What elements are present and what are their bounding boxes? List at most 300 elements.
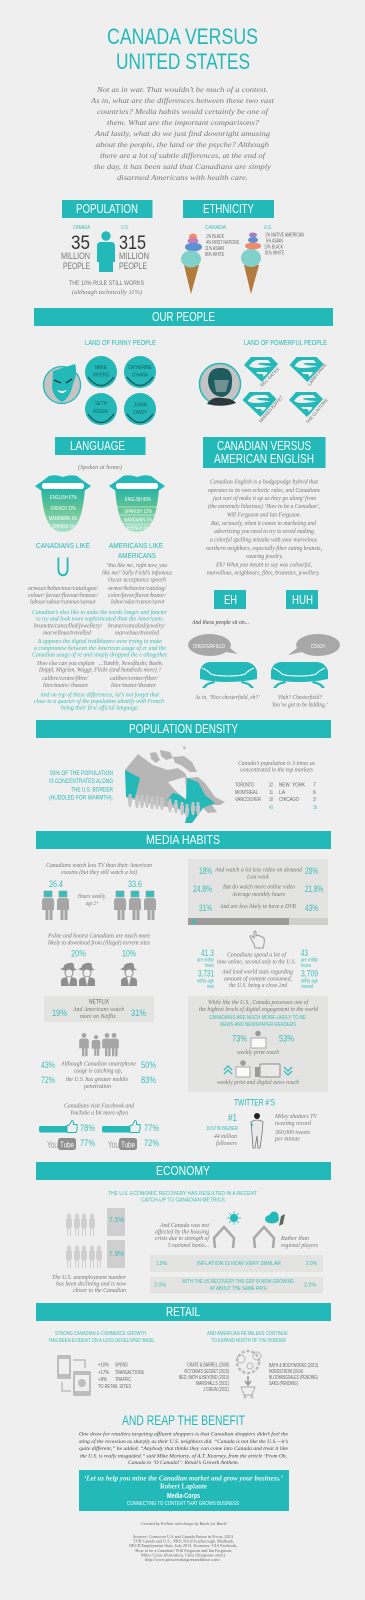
callout: 93 percent near border: THE U.S. BORDER (71, 786, 113, 794)
credits line: ‘Created by Pollinit with design by Battle for Battle’ (140, 1521, 229, 1526)
top markets comparison: CHICAGO (279, 797, 299, 803)
sources: TVB Canada and U.S., NRS, NAA/Scarborough, Madbank, (133, 1540, 234, 1544)
e-commerce stats (98, 1363, 144, 1390)
spelling comparison: double l words: brunette/cancelled/jewellery/ (34, 624, 103, 630)
icon: US tongue with language shares (109, 475, 165, 532)
icons: pirates (60, 963, 138, 986)
panel: torrents (47, 934, 151, 986)
panel: American retailers: AND AMERICAN RETAILERS CONTINUE (207, 1331, 289, 1337)
spelling comparison: -re words: liter/meter/theater (111, 683, 157, 689)
badge: Catherine O'Hara (124, 356, 156, 388)
online video row: 24.8% (193, 884, 212, 894)
engagement text: While like the U.S., Canada possesses one of (208, 999, 309, 1006)
panel: Facebook and YouTube: YouTube a bit more often (70, 1110, 128, 1116)
panel: torrents: likely to download from (illegal) torrent sites (48, 940, 151, 946)
badge: Catherine O'Hara: O’HARA (132, 372, 149, 378)
stats: monthly hours: 41.3 (201, 948, 214, 958)
heading: retail (36, 1303, 331, 1321)
panel: Netflix (44, 996, 154, 1022)
YouTube US: 72% (144, 1138, 159, 1148)
note: longer and fancier words: to try and look more sophisticated than the Americans. (36, 616, 164, 622)
online video row: 21.8% (305, 884, 323, 894)
YouTube US (108, 1138, 159, 1151)
English explanation text: marvellous, neighbours, fibre, brunettes, jewellery. (207, 570, 320, 576)
news readers heading: NEWS AND NEWSPAPER READERS (220, 1022, 297, 1028)
sofa captions: As in, ‘Nice chesterfield, eh?’ (194, 694, 260, 701)
top markets comparison: LA (279, 790, 286, 796)
panel: e-commerce: STRONG CANADIAN E-COMMERCE GROWTH (55, 1331, 146, 1337)
panel: Facebook and YouTube (39, 1104, 159, 1151)
top markets comparison: concentrated in the top markets (240, 768, 314, 774)
online time text: Canadians spend a lot of (227, 952, 287, 959)
icon: Canada tongue with language shares: SPANISH 1% (52, 524, 75, 530)
callout: Media-Corps quote: Media-Corps (167, 1493, 200, 1500)
panel: torrents: 20% (71, 949, 86, 959)
e-commerce stats: SPEND (115, 1363, 128, 1369)
housing text Canada (155, 1223, 210, 1249)
top markets comparison: 22 (269, 783, 273, 789)
icon: house with sun (214, 1211, 241, 1248)
sources: ‘How to be a Canadian’ Will Ferguson and Ian Ferguson, (134, 1548, 232, 1554)
inflation strip (150, 1255, 323, 1272)
speech bubble: chesterfield (188, 634, 238, 656)
panel: American retailers: TO EXPAND NORTH OF THE BORDER (211, 1338, 286, 1344)
unemployment text: has been declining and is now (56, 1282, 126, 1288)
note: digital trailblazers: It appears the digital trailblazers were trying to make (37, 639, 162, 645)
population figures: U.S. (121, 225, 129, 231)
stats: monthly hours: hours (205, 963, 214, 969)
housing text Canada: affected by the housing (155, 1228, 209, 1236)
badge: John Candy: CANDY (133, 410, 148, 416)
icon: US tongue with language shares: SPANISH 12% (124, 509, 152, 515)
panel: American retailers (179, 1331, 318, 1398)
speech bubble: couch: COUCH (311, 644, 325, 650)
smartphone text: penetration (83, 1084, 111, 1090)
English explanation text: just sort of make it up as they go along’ from (212, 495, 316, 502)
title: CANADA VERSUS (107, 24, 258, 49)
icon: US ice cream cone (241, 232, 261, 294)
spelling comparison: -our words: armour/behaviour/catalogue/ (28, 586, 99, 592)
online video row: But do watch more online video (223, 884, 295, 890)
e-commerce stats: TRANSACTIONS (115, 1370, 144, 1376)
icon: US tongue with language shares: FRENCH 1% (127, 526, 149, 532)
stats: monthly pages: mthly age (197, 978, 214, 984)
online time text (217, 952, 296, 989)
panel: online time (197, 948, 318, 990)
10 percent rule note (69, 281, 144, 296)
online video row (193, 884, 323, 898)
e-commerce stats: +9% (98, 1377, 107, 1383)
heading: economy: ECONOMY (156, 1163, 210, 1178)
panel: ethnicity (181, 200, 304, 294)
unemployment text (52, 1275, 127, 1294)
icon: shopping cloud and cart (237, 1351, 261, 1398)
subheads: Canadians like and Americans like: AMERICANS LIKE (109, 541, 163, 550)
Canada ethnicity legend (205, 225, 239, 258)
panel: news reading: weekly print and digital news reach (217, 1080, 299, 1086)
e-commerce stats: TRAFFIC (115, 1377, 131, 1383)
English explanation text: wearing jewelry. (246, 554, 283, 560)
icon: right sofa (271, 662, 328, 688)
note: dropped e brand names: How else can you explain ...Tumblr, Newsflashr, Bashr, (36, 660, 164, 667)
English explanation text: Canadian English is a hodgepodge hybrid that (210, 480, 318, 486)
badge: Seth Rogen: ROGEN (93, 409, 108, 415)
online time text: And lead world stats regarding (221, 970, 293, 976)
benefit paragraph: quite different,” he added. “Anybody that thinks they can come into Canada and treat it like (79, 1445, 289, 1452)
heading: Canadian versus American English: AMERICAN ENGLISH (214, 451, 314, 466)
sources: Sources: Comscore U.S and Canada Future in Focus, 2013 (133, 1535, 233, 1540)
stats: monthly pages (197, 969, 318, 990)
spelling comparison: -our words: labor/odor/rumor/savor (111, 600, 166, 606)
retailer list left: VICTORIA’S SECRET (2010) (184, 1369, 229, 1375)
economy intro heading: CATCH-UP TO CANADIAN METRICS. (141, 1198, 226, 1204)
shield: Warren Buffet: WARREN BUFFET (258, 395, 284, 424)
note: French first language (34, 692, 164, 712)
GDP strip: 2.0% (154, 1282, 167, 1288)
retailer list left (179, 1363, 229, 1393)
sources: http://www.picturesthatgoesandthose.com/. (145, 1558, 221, 1562)
callout: Media-Corps quote: ‘Let us help you mine the Canadian market and grow your business.’ (84, 1474, 283, 1483)
Canada ethnicity legend: 1% BLACK (206, 234, 224, 240)
shield: Larry Page: LARRY PAGE (307, 362, 327, 387)
heading: Canadian versus American English (203, 437, 326, 468)
panel: Canadian versus American English (188, 437, 340, 708)
Justin Bieber stat (206, 1113, 238, 1147)
panel: news reading (188, 996, 328, 1092)
icons: TV-headed people (42, 891, 156, 920)
print reach stats: 53% (279, 1034, 294, 1044)
housing text Canada: 5 national banks... (168, 1243, 209, 1249)
badge: Catherine O'Hara: CATHERINE (128, 365, 153, 371)
callout: 93 percent near border: 93% OF THE POPULATION (50, 770, 113, 777)
panel: population density (49, 746, 317, 823)
icon: house with cloud (254, 1212, 285, 1248)
icon: arrows up (224, 1066, 232, 1074)
panel: Twitter (206, 1098, 318, 1148)
sources: OECD Employment Stats, July 2013, Economy -CIA Factbook, (129, 1544, 237, 1549)
intro text block: countries? Media habits would certainly be one of (97, 107, 269, 116)
icon: digital reader (255, 1064, 280, 1077)
Canada ethnicity legend: 86% WHITE (205, 252, 224, 258)
engagement text (199, 999, 318, 1013)
intro text block (90, 85, 275, 182)
YouTube Canada: 77% (80, 1138, 95, 1148)
English explanation text: operates to its own eclectic rules, and Canadians (208, 488, 321, 494)
badge: Mike Myers: MIKE (95, 365, 108, 371)
video on demand row (199, 866, 318, 880)
English explanation text: a colorful spelling mistake with your marvelous (210, 536, 318, 544)
Justin Bieber stat: 44 million (214, 1133, 237, 1140)
top markets comparison: 11 (269, 790, 273, 796)
smartphone text: usage is catching up, (74, 1068, 123, 1074)
heading: our people (34, 308, 333, 326)
stats: monthly pages: mthly age (301, 978, 318, 984)
Miley stat: per minute (274, 1136, 300, 1142)
housing text regional: Rather than (280, 1236, 309, 1242)
heading: media habits: MEDIA HABITS (146, 832, 220, 847)
benefit paragraph: Canada to ‘O Canada!’: Retail’s Growth Anthem. (128, 1459, 239, 1466)
DVR row (199, 903, 318, 913)
icon: Canada tongue with language shares: MANDARIN 1% (49, 516, 77, 522)
panel: smartphones: 83% (141, 1075, 156, 1085)
spelling comparison: double l words: brunet/canceled/jewelry/ (108, 624, 166, 630)
YouTube Canada (47, 1138, 95, 1151)
badge: John Candy (124, 393, 156, 425)
spelling comparison: -re words: litre/metre/ theatre (43, 683, 88, 689)
smartphone text (60, 1062, 136, 1090)
DVR row: 43% (305, 903, 318, 913)
e-commerce stats: +17% (98, 1370, 109, 1376)
Canada ethnicity legend: 4% FIRST NATIONS (206, 240, 239, 246)
panel: smartphones: 72% (41, 1075, 55, 1085)
top markets comparison: MONTREAL (235, 790, 258, 796)
icon: left sofa (200, 662, 257, 688)
Miley stat (274, 1114, 318, 1142)
icon: print reader (236, 1060, 250, 1077)
panel: Twitter: TWITTER #’S (234, 1098, 275, 1108)
video on demand row: And watch a lot less video on demand (214, 868, 302, 874)
panel: video viewing (188, 859, 328, 925)
retailer list right: BLOOMINGDALES (PENDING) (269, 1375, 318, 1381)
US ethnicity legend (264, 225, 304, 256)
panel: population (61, 200, 152, 296)
top markets comparison: 7 (313, 783, 316, 789)
top markets comparison: 43 (269, 805, 273, 811)
panel: TV watching: age 2+ (86, 901, 99, 907)
badge: HUH: HUH (292, 592, 313, 607)
badge: EH: EH (224, 592, 237, 607)
intro text block: the day, it has been said that Canadians are simply (94, 162, 272, 171)
heading: media habits (36, 831, 331, 849)
intro text block: Not as in war. That wouldn’t be much of a contest. (96, 85, 268, 94)
speech bubble: couch (288, 634, 340, 656)
panel: TV watching: Hours weekly, (77, 894, 106, 900)
badge: Seth Rogen: SETH (95, 401, 107, 407)
population figures: MILLION (119, 251, 149, 261)
panel: Netflix: NETFLIX (89, 998, 109, 1006)
top markets comparison (235, 761, 317, 811)
unemployment text: closer to the Canadian (73, 1288, 126, 1294)
sources: Miley Cyrus illustration, Chris (Simpsons artist) (141, 1554, 226, 1558)
population figures: 315 (119, 233, 146, 254)
note: digital trailblazers: a compromise between the American usage of er and the (34, 645, 166, 652)
spelling comparison: -our words: color/favor/flavor/honor/ (108, 592, 167, 599)
note: dropped e brand names: Doppl, Migram, Waggr, Flickr (and hundreds more) ? (38, 666, 161, 674)
stats: monthly pages: 3,709 (301, 969, 318, 979)
YouTube Canada: You (47, 1140, 58, 1151)
smartphone text: Although Canadian smartphone (60, 1062, 136, 1068)
top markets comparison: 6 (313, 790, 316, 796)
spelling comparison: -re words: calibre/centre/fibre/ (42, 675, 89, 682)
spelling comparison: double l words: marvellous/travelled (43, 630, 91, 636)
note: dropped e brand names (36, 660, 164, 674)
US ethnicity legend: 1% NATIVE AMERICAN (265, 232, 304, 238)
portrait: caricature face (44, 364, 80, 404)
note: digital trailblazers: Canadian usage of re and simply dropped the e altogether. (32, 652, 168, 658)
callout: 93 percent near border: IS CONCENTRATED ALONG (49, 778, 113, 785)
English explanation text: But, seriously, when it comes to marketing and (211, 521, 316, 527)
US ethnicity legend: 13% BLACK (264, 244, 283, 250)
news readers heading (209, 1015, 307, 1028)
panel: TV watching: 26.4 (49, 879, 63, 889)
intro text block: disarmed Americans with health care. (117, 173, 248, 182)
English explanation text (206, 480, 323, 576)
shield: The Clintons: THE CLINTONS (305, 398, 329, 425)
retailer list right: NORDSTROM (2014) (269, 1369, 303, 1375)
10 percent rule note: (although technically 11%) (72, 289, 142, 296)
benefit paragraph: One draw for retailers targeting affluent shoppers is that Canadian shoppers didn’t feel the (79, 1431, 289, 1438)
panel: land of powerful people: LAND OF POWERFUL PEOPLE (244, 340, 327, 347)
Sally Field quote: like me!’ Sally Field’s infamous (102, 570, 173, 576)
stats: monthly hours: hours (301, 963, 311, 969)
heading: language (55, 437, 146, 455)
badge: Seth Rogen (85, 393, 117, 425)
icon: person (97, 231, 115, 272)
icons: phones and arrows (57, 1355, 91, 1396)
badge: EH (214, 590, 246, 609)
note: digital trailblazers (32, 639, 168, 658)
panel: Facebook and YouTube: Canadians visit Facebook and (64, 1104, 134, 1110)
heading: and reap the benefit: AND REAP THE BENEFIT (122, 1412, 245, 1428)
spelling comparison: double l words: marvelous/traveled (115, 630, 159, 636)
icon: Miley figure (250, 1113, 263, 1148)
icon: US tongue with language shares: MANDARIN 1% (124, 518, 152, 524)
panel: land of funny people (44, 340, 156, 425)
intro text block: As in, what are the differences between these two vast (90, 96, 275, 105)
inflation strip: 1.8% (156, 1261, 168, 1267)
callout: Media-Corps quote: Robert Laplante (160, 1482, 208, 1490)
GDP strip: 2.2% (304, 1282, 317, 1288)
badge: John Candy: JOHN (134, 402, 147, 408)
housing text regional (280, 1236, 319, 1249)
panel: Netflix: And Americans watch (72, 1007, 124, 1013)
sofa captions (194, 694, 328, 708)
sofa captions: You’ve got to be kidding.’ (272, 702, 328, 708)
engagement text: the highest levels of digital engagement in the world (199, 1006, 318, 1013)
icon: Canada tongue with language shares (35, 475, 91, 532)
panel: Netflix: 31% (131, 1008, 146, 1018)
note: longer and fancier words: Canadian’s also like to make the words longer and fancier (32, 609, 168, 616)
heading: economy (36, 1162, 331, 1180)
note: French first language: close to a quarter of the population identify with French (34, 698, 164, 705)
unemployment US (66, 1240, 125, 1268)
callout: 93 percent near border (49, 770, 113, 802)
DVR row: 31% (199, 903, 212, 913)
spelling comparison: -our words: colour/ favour/flavour/honour/ (28, 592, 99, 599)
title (107, 24, 258, 74)
unemployment Canada (66, 1208, 125, 1236)
panel: e-commerce: HAS BEEN EVIDENT ON A LESS DEVELOPED BASE (49, 1338, 155, 1344)
panel: TV watching: Canadians watch less TV than their American (46, 863, 152, 869)
economy intro heading: THE U.S. ECONOMIC RECOVERY HAS RESULTED IN A RECENT (108, 1191, 257, 1197)
unemployment text: The U.S. unemployment number (52, 1275, 127, 1281)
stats: monthly hours: are mthly (197, 958, 214, 964)
population figures (61, 225, 149, 271)
retailer list left: J CREW (2011) (203, 1387, 229, 1393)
English explanation text: Will Ferguson and Ian Ferguson. (227, 512, 301, 518)
spelling comparison: double l words (34, 624, 166, 636)
video progress bar (188, 918, 328, 925)
English explanation text: northern neighbors, especially fiber eating brunets, (206, 545, 323, 552)
panel: TV watching (42, 863, 156, 920)
e-commerce stats: TO RETAIL SITES (98, 1384, 132, 1390)
top markets comparison: 16 (313, 805, 317, 811)
online video row: Average monthly hours (231, 892, 286, 898)
top markets comparison: TORONTO (235, 783, 254, 789)
panel: Netflix: 19% (52, 1008, 67, 1018)
panel: TV watching: cousins (but they still watch a lot) (61, 869, 137, 876)
US ethnicity legend: 81% WHITE (265, 250, 284, 256)
icon: arrows down (284, 1067, 292, 1075)
panel: smartphones: 50% (141, 1060, 156, 1070)
heading: Canadian versus American English: CANADIAN VERSUS (217, 438, 311, 453)
benefit paragraph: sting of the recession as sharply as their U.S. neighbors did. “Canada is not like the U.S.—it’s (79, 1438, 288, 1445)
heading: population density (36, 720, 331, 738)
heading: retail: RETAIL (166, 1304, 200, 1319)
icon: Canada ice cream cone (181, 234, 202, 294)
unemployment US: 7.3% (109, 1251, 124, 1258)
panel: land of powerful people (200, 340, 329, 425)
panel: economy (52, 1191, 323, 1294)
spelling comparison: -re words: caliber/center/fiber/ (110, 675, 159, 682)
badge: HUH (286, 590, 318, 609)
icon: Canada tongue with language shares: FRENCH 22% (51, 506, 76, 512)
callout: Media-Corps quote (79, 1470, 289, 1511)
Facebook bar US: 77% (144, 1123, 159, 1133)
stats: monthly hours: 43 (301, 948, 308, 958)
panel: smartphones (41, 1033, 156, 1090)
Sally Field quote: ‘You like me, right now, you (106, 562, 167, 569)
online time text: the U.S. being a close 2nd (229, 983, 287, 989)
note: French first language: being their first official language. (61, 704, 139, 712)
retailer list right (269, 1363, 318, 1387)
panel: Canadian versus American English: And these people sit on... (191, 620, 249, 626)
big letter U: U (56, 552, 70, 582)
population figures: PEOPLE (63, 261, 90, 271)
speech bubble: chesterfield: CHESTERFIELD (193, 644, 225, 650)
top markets comparison: 3 (313, 797, 316, 803)
panel: torrents: Polite and honest Canadians are much more (47, 934, 150, 940)
YouTube US: You (108, 1140, 119, 1151)
top markets comparison: 10 (269, 797, 273, 803)
panel: language: (Spoken at home) (78, 464, 122, 471)
panel: e-commerce (49, 1331, 155, 1396)
population figures: MILLION (61, 251, 90, 261)
top markets comparison: NEW YORK (279, 783, 306, 789)
icon: pointing hand cursor (250, 931, 264, 948)
icons: family group (79, 1033, 119, 1056)
Miley stat: tweeting record (275, 1121, 311, 1127)
intro text block: And lastly, what do we just find downright amusing (94, 129, 270, 138)
online time text: amount of content consumed, (224, 976, 293, 982)
English explanation text: (the extremely hilarious) ‘How to be a Canadian’, (208, 503, 321, 510)
GDP strip: WITH THE US RECOVERY THE GDP IS NOW GROWING (182, 1279, 294, 1285)
population figures: 35 (71, 233, 90, 254)
panel: torrents: 10% (122, 949, 136, 959)
panel: Netflix: more on Netflix (80, 1013, 116, 1020)
retailer list left: CRATE & BARREL (2008) (187, 1363, 229, 1369)
DVR row: And are less likely to have a DVR (219, 904, 296, 910)
population figures: PEOPLE (119, 261, 147, 271)
YouTube Canada: Tube (60, 1140, 74, 1150)
YouTube US: Tube (121, 1140, 135, 1150)
unemployment Canada: 7.1% (109, 1217, 124, 1224)
Justin Bieber stat: #1 (228, 1113, 237, 1124)
stats: monthly pages: viewed (207, 984, 214, 990)
Justin Bieber stat: followers (216, 1140, 238, 1147)
portrait: president (200, 364, 240, 406)
sources (129, 1535, 237, 1562)
